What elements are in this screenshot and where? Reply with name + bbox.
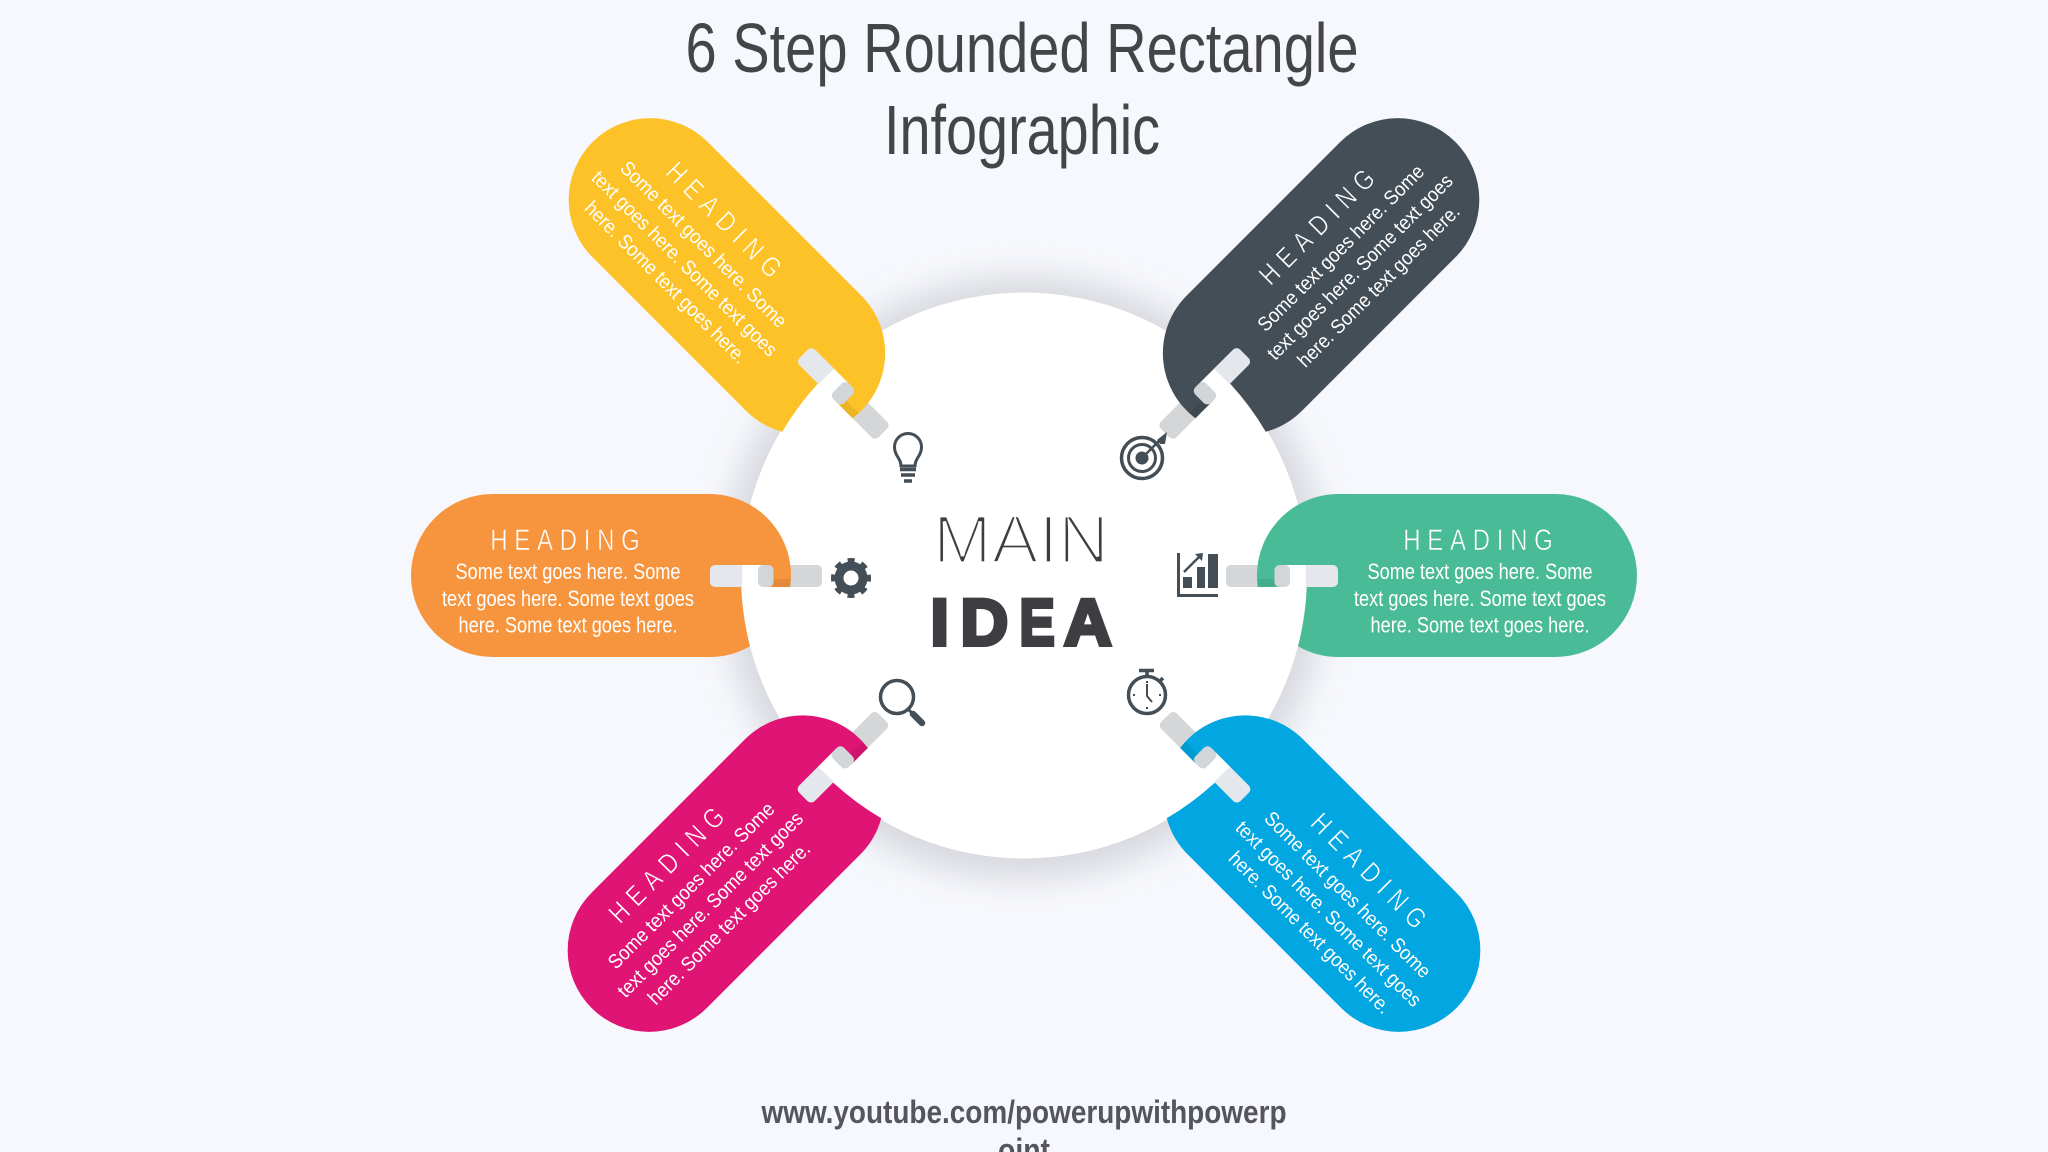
yellow body text: text goes here. Some text goes xyxy=(587,167,781,361)
panel: orange step xyxy=(411,494,822,657)
blue body text: here. Some text goes here. xyxy=(1224,847,1395,1019)
orange body text: text goes here. Some text goes xyxy=(442,586,694,611)
blue heading: HEADING xyxy=(1304,807,1432,935)
yellow body text: here. Some text goes here. xyxy=(580,197,751,368)
green body text: here. Some text goes here. xyxy=(1370,612,1590,638)
orange body text: here. Some text goes here. xyxy=(458,612,678,638)
footer url: www.youtube.com/powerupwithpowerp xyxy=(761,1094,1286,1130)
pink heading: HEADING xyxy=(603,802,731,930)
icon: target xyxy=(1122,432,1167,478)
green body text: text goes here. Some text goes xyxy=(1354,586,1606,611)
pink body text: Some text goes here. Some xyxy=(604,798,779,974)
orange body text: Some text goes here. Some xyxy=(456,559,680,584)
main idea label xyxy=(930,501,1112,659)
blue body text: text goes here. Some text goes xyxy=(1231,817,1425,1011)
main idea label: E xyxy=(1020,585,1055,659)
yellow body text: Some text goes here. Some xyxy=(616,157,791,333)
green heading: HEADING xyxy=(1403,522,1553,557)
title: 6 Step Rounded Rectangle xyxy=(686,9,1358,87)
slate body text: text goes here. Some text goes xyxy=(1263,170,1458,365)
main idea label: D xyxy=(960,585,1008,659)
main idea label: A xyxy=(1064,585,1112,659)
panel: green step xyxy=(1226,494,1637,657)
pink body text: here. Some text goes here. xyxy=(644,838,815,1009)
orange body text xyxy=(442,559,694,638)
icon: bar chart with arrow xyxy=(1177,553,1218,597)
yellow heading: HEADING xyxy=(660,156,787,284)
panel: blue step xyxy=(1108,660,1514,1066)
panel: yellow step xyxy=(535,84,941,490)
icon: gear xyxy=(833,560,869,596)
icon: magnifier xyxy=(880,680,922,723)
panel: pink step xyxy=(534,660,940,1066)
green body text: Some text goes here. Some xyxy=(1368,559,1592,584)
central circle xyxy=(722,276,1326,880)
icon: lightbulb xyxy=(894,434,922,481)
title: Infographic xyxy=(884,91,1160,169)
main idea label: I xyxy=(930,585,949,659)
title xyxy=(686,9,1358,169)
footer url xyxy=(761,1094,1286,1152)
icon: stopwatch xyxy=(1128,670,1166,714)
slate body text: here. Some text goes here. xyxy=(1294,201,1465,372)
slate heading: HEADING xyxy=(1254,164,1381,291)
slate body text: Some text goes here. Some xyxy=(1254,161,1429,336)
main idea label: MAIN xyxy=(933,501,1109,578)
panel: dark slate step xyxy=(1107,84,1513,490)
orange heading: HEADING xyxy=(490,522,640,557)
green body text xyxy=(1354,559,1606,638)
blue body text: Some text goes here. Some xyxy=(1260,807,1435,983)
pink body text: text goes here. Some text goes xyxy=(613,808,808,1002)
